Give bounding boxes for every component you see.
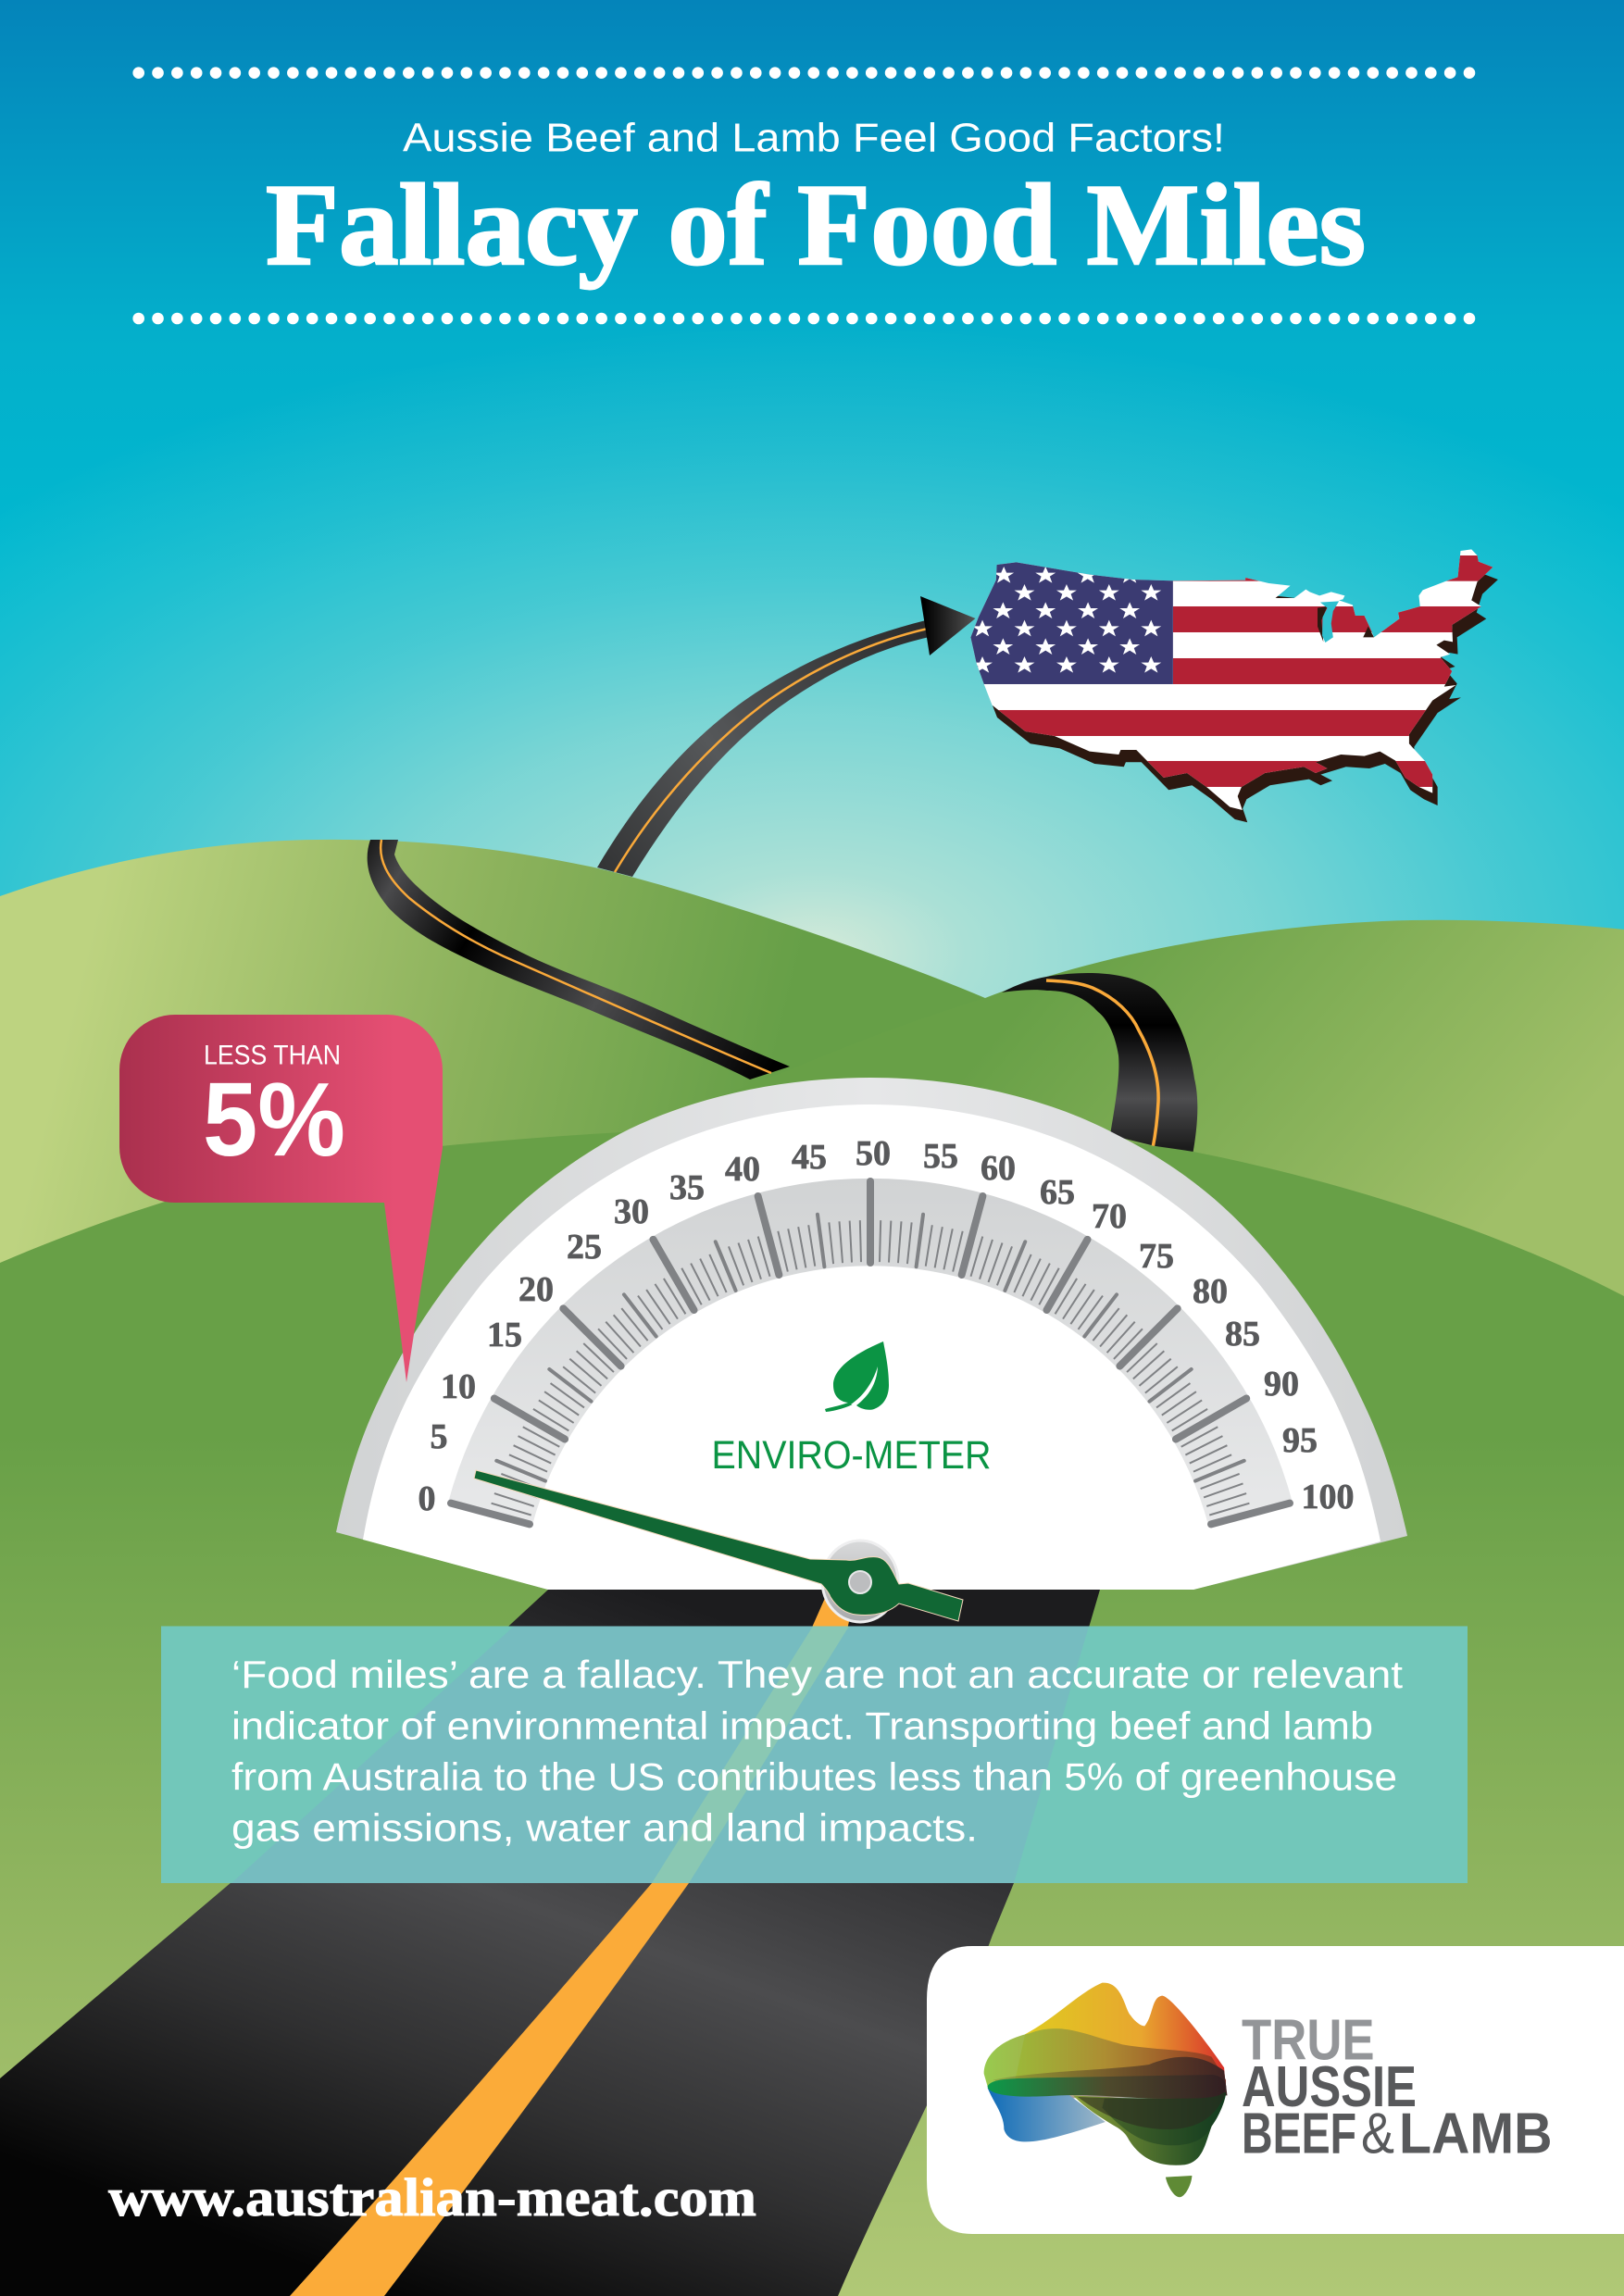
medium ticks bbox=[496, 1215, 1244, 1481]
icon: leaf bbox=[825, 1341, 889, 1412]
panel copy: gas emissions, water and land impacts. bbox=[231, 1805, 978, 1849]
scale numbers: 70 bbox=[1092, 1197, 1127, 1236]
right hill bbox=[417, 920, 1624, 1389]
callout: less than 5%: 5% bbox=[203, 1061, 345, 1178]
callout: less than 5%: LESS THAN bbox=[204, 1040, 341, 1070]
flag stripes and stars bbox=[965, 546, 1510, 817]
needle hub base bbox=[822, 1541, 898, 1622]
map extrusion shadow bbox=[976, 562, 1498, 822]
logo wordmark: AUSSIE bbox=[1242, 2055, 1417, 2119]
panel copy: ‘Food miles’ are a fallacy. They are not an accurate or relevant bbox=[231, 1653, 1403, 1696]
scale numbers: 85 bbox=[1225, 1315, 1260, 1354]
callout: less than 5% bbox=[119, 1015, 443, 1382]
road rising into the sky with arrow bbox=[597, 596, 976, 877]
scale numbers: 25 bbox=[567, 1228, 602, 1267]
top dotted rule bbox=[139, 67, 1472, 79]
scale numbers: 50 bbox=[856, 1134, 891, 1173]
minor ticks bbox=[492, 1220, 1249, 1516]
title: Fallacy of Food Miles bbox=[266, 161, 1366, 290]
scale numbers: 65 bbox=[1040, 1173, 1075, 1212]
logo wordmark bbox=[1242, 2008, 1552, 2165]
scale numbers: 40 bbox=[725, 1150, 760, 1189]
scale numbers: 90 bbox=[1264, 1365, 1299, 1404]
enviro-meter gauge bbox=[336, 1078, 1407, 1622]
logo panel bbox=[927, 1946, 1624, 2234]
scale numbers: 75 bbox=[1139, 1237, 1174, 1276]
scale numbers: 100 bbox=[1302, 1478, 1354, 1516]
gauge face bbox=[363, 1104, 1380, 1590]
logo wordmark: TRUE bbox=[1242, 2008, 1375, 2072]
scale numbers bbox=[418, 1134, 1354, 1518]
logo wordmark: BEEF bbox=[1242, 2102, 1356, 2165]
winding road on left hill bbox=[368, 840, 790, 1079]
text panel bbox=[161, 1626, 1468, 1883]
needle pivot bbox=[849, 1571, 871, 1593]
scale numbers: 10 bbox=[441, 1367, 476, 1406]
major ticks bbox=[451, 1181, 1290, 1524]
road seen through panel bbox=[231, 1626, 1089, 1883]
curving road on right hill bbox=[1002, 973, 1197, 1155]
Lake Michigan cut-out bbox=[1320, 601, 1339, 643]
logo wordmark: LAMB bbox=[1399, 2102, 1552, 2165]
panel copy bbox=[231, 1653, 1403, 1849]
centre line seen through panel bbox=[652, 1626, 849, 1883]
subtitle: Aussie Beef and Lamb Feel Good Factors! bbox=[403, 115, 1225, 160]
scale numbers: 60 bbox=[981, 1149, 1016, 1188]
gauge label: ENVIRO-METER bbox=[711, 1433, 991, 1478]
scale numbers: 55 bbox=[923, 1137, 958, 1176]
icon: Australia logo bbox=[984, 1983, 1227, 2197]
road centre line bbox=[290, 1590, 856, 2296]
scale numbers: 20 bbox=[518, 1270, 554, 1309]
scale numbers: 0 bbox=[418, 1479, 435, 1518]
scale numbers: 5 bbox=[430, 1417, 448, 1456]
needle bbox=[474, 1470, 963, 1621]
scale numbers: 45 bbox=[792, 1138, 827, 1177]
front hill bbox=[0, 1122, 1624, 2296]
scale numbers: 35 bbox=[669, 1168, 705, 1207]
website URL: www.australian-meat.com bbox=[108, 2167, 756, 2227]
panel copy: from Australia to the US contributes less than 5% of greenhouse bbox=[231, 1754, 1397, 1798]
scale numbers: 95 bbox=[1282, 1421, 1318, 1460]
scale numbers: 15 bbox=[487, 1316, 522, 1354]
main road bbox=[0, 1590, 1100, 2296]
USA flag map bbox=[965, 546, 1510, 822]
scale band bbox=[448, 1179, 1293, 1525]
scale numbers: 80 bbox=[1193, 1272, 1228, 1311]
scale numbers: 30 bbox=[614, 1192, 649, 1231]
gauge rim bbox=[336, 1078, 1407, 1590]
bottom dotted rule bbox=[139, 313, 1472, 324]
panel copy: indicator of environmental impact. Transporting beef and lamb bbox=[231, 1703, 1373, 1747]
logo wordmark: & bbox=[1361, 2102, 1394, 2165]
back left hill bbox=[0, 840, 1093, 1389]
